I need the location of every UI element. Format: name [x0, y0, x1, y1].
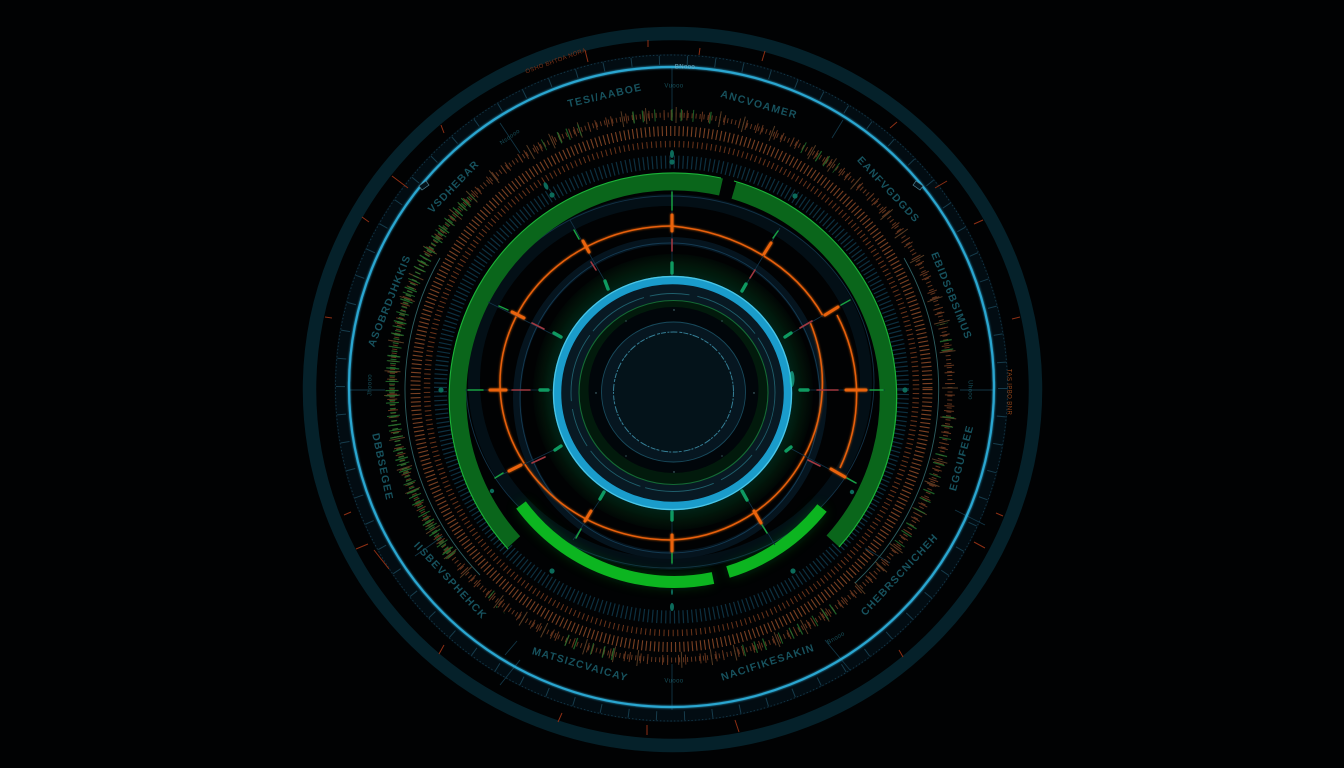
green arc bright edges	[449, 173, 897, 549]
spoke thin lines	[465, 190, 885, 565]
teal dots	[438, 150, 908, 611]
data dotted ring	[614, 332, 734, 452]
main blue ring	[349, 67, 994, 707]
label lower left: IISBEVSPHEHCK	[411, 540, 489, 622]
navy ring	[517, 241, 823, 555]
spoke marks orange	[490, 215, 866, 551]
waveform band green left	[386, 192, 477, 560]
label left upper: ASOBRDJHKKIS	[366, 253, 414, 349]
small tick dots	[595, 309, 755, 473]
hub band fill	[561, 282, 785, 502]
central hub	[554, 276, 794, 510]
spoke marks pink	[512, 239, 838, 466]
bright blue ring	[557, 280, 788, 506]
radial HUD infographic	[302, 26, 1042, 752]
small labels	[368, 48, 1011, 685]
dark green arc right	[734, 190, 889, 541]
black ring	[588, 307, 758, 473]
orange tick band inner	[427, 144, 916, 633]
outer dark ring	[310, 34, 1036, 746]
blue ring highlight	[554, 276, 792, 510]
small label right: Uhooo	[966, 380, 972, 400]
thin pale arcs	[405, 258, 939, 583]
radial blue guide lines	[350, 66, 995, 710]
orange label right: TAS IPBO BNR	[1005, 369, 1011, 415]
label upper right: EANFVGDGDS	[854, 154, 922, 225]
label top right: ANCVOAMER	[719, 88, 799, 122]
dark green arc left	[458, 182, 721, 542]
dark disc ring	[602, 322, 746, 462]
label left lower: DBBSEGEE	[369, 432, 395, 502]
label right lower: EGGUFEEE	[947, 424, 976, 492]
center disc	[614, 332, 734, 452]
blue label top: BNooo	[675, 65, 695, 71]
small label upper left: Nsoooo	[499, 128, 522, 147]
orange rings	[500, 226, 857, 540]
label bottom left: MATSIZCVAICAY	[531, 645, 629, 684]
spoke marks green	[540, 263, 808, 520]
label lower right: CHEBRSCNICHEH	[859, 531, 941, 618]
blue ring glow	[557, 280, 788, 506]
bright green arc left	[521, 505, 713, 582]
glow of bright arcs	[521, 505, 822, 581]
ring markers	[419, 181, 923, 190]
curved labels	[366, 81, 976, 684]
label upper left: VSDHEBAR	[426, 158, 482, 216]
waveform band orange	[392, 115, 950, 660]
inner bracket ring	[571, 294, 775, 492]
label right upper: EBIDS6BSIMUS	[928, 250, 974, 341]
bright green arc right	[728, 508, 822, 572]
blue tick band	[440, 162, 902, 617]
right ring glint	[790, 371, 794, 387]
label top left: TESI/AABOE	[566, 81, 643, 110]
waveform band green accents	[488, 109, 954, 660]
small label top: Vuooo	[664, 84, 684, 90]
thin ring below green arc	[466, 196, 874, 568]
dark band behind bright arcs	[474, 200, 866, 564]
orange label top: OSHO BHTOA NORA	[525, 48, 588, 75]
small label left: Jhoooo	[368, 374, 374, 396]
orange tick band outer	[416, 131, 928, 647]
small label bottom: Vuooo	[664, 679, 684, 685]
green ring	[579, 300, 768, 484]
dark green inner glow band	[533, 254, 813, 530]
label bottom right: NACIFIKESAKIN	[720, 642, 816, 684]
spoke marks thin green	[468, 192, 883, 563]
outer tick scale	[336, 55, 1008, 721]
small label lower right: Bnooo	[826, 631, 846, 646]
orange outer tick marks	[325, 40, 1020, 735]
